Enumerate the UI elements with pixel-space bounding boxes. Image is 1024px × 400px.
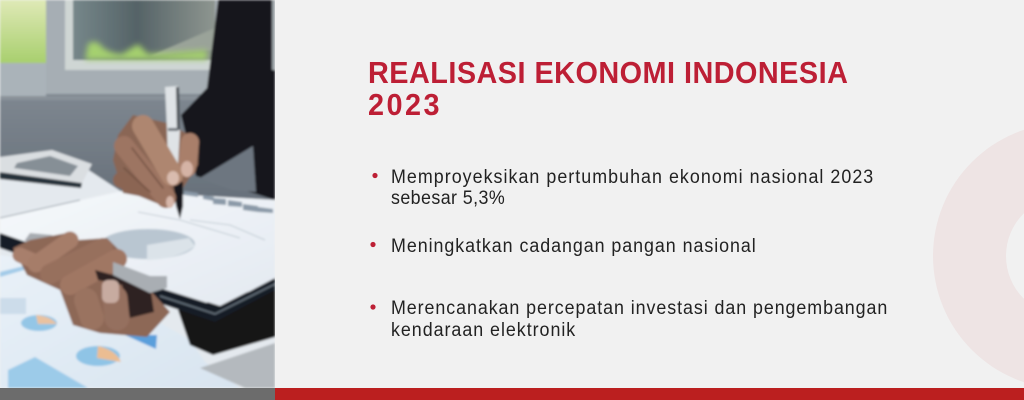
calculator (0, 172, 82, 188)
bullet item 1 (372, 165, 873, 208)
writing hand silhouette (113, 115, 199, 205)
pie chart on paper (101, 229, 195, 259)
bottom bar: red (275, 388, 1024, 400)
holding hand fingers (20, 240, 117, 318)
dark shadow under clipboard (178, 285, 275, 355)
chart lines (138, 212, 265, 240)
bullet list (370, 165, 887, 340)
bullet item 3 (370, 296, 887, 340)
title: REALISASI EKONOMI INDONESIA (368, 56, 848, 90)
clip left (24, 232, 52, 243)
clip right (113, 262, 167, 293)
holding hand silhouette (13, 232, 170, 337)
bullet item 1: Memproyeksikan pertumbuhan ekonomi nasional 2023 (391, 165, 873, 187)
pen (165, 86, 180, 165)
writing hand fingers (121, 126, 190, 198)
report bars (184, 191, 273, 213)
bullet item 3: kendaraan elektronik (391, 318, 576, 340)
clipboard paper (0, 191, 275, 306)
title: 2023 (368, 88, 440, 122)
jacket (181, 0, 275, 200)
desk surface (0, 169, 275, 364)
thumb nail (102, 280, 119, 303)
title (368, 56, 848, 122)
bullet item 3: Merencanakan percepatan investasi dan pengembangan (391, 296, 887, 318)
writing hand nails (167, 171, 179, 185)
shadow in grip (95, 270, 154, 318)
thumb (115, 298, 117, 318)
bottom bar: grey (0, 388, 275, 400)
decorative ring (933, 123, 1024, 389)
bullet item 2: Meningkatkan cadangan pangan nasional (391, 234, 756, 256)
panel: right background (275, 0, 1024, 400)
bullet item 1: sebesar 5,3% (391, 186, 505, 208)
lower chart sheet (0, 255, 240, 388)
photo: businessperson reviewing charts (0, 0, 275, 388)
